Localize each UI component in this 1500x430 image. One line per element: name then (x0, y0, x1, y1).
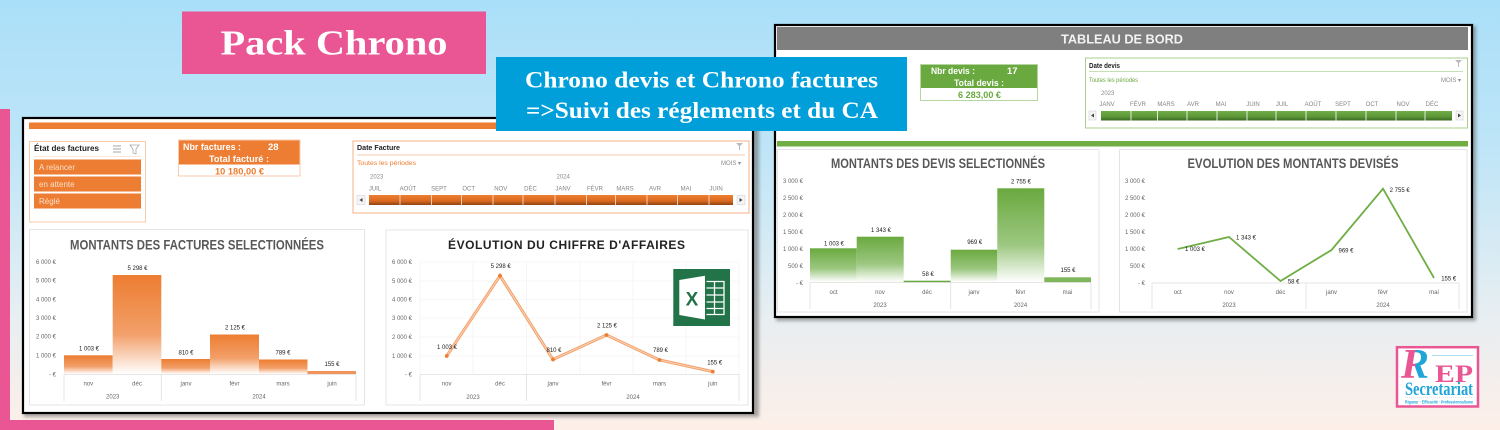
slicer: date facture: 2024 (556, 174, 571, 180)
chart: montants des devis: déc (922, 290, 932, 296)
chart: montants des devis: 1 343 € (871, 228, 892, 234)
chart: montants des devis: 2024 (1014, 303, 1028, 309)
chart: montants des devis: 2023 (873, 303, 887, 309)
slicer: date devis: JUIL (1276, 102, 1289, 108)
chart: evolution des montants devises: 3 000 € (1125, 179, 1146, 185)
KPI: devis: 6 283,00 € (958, 90, 1002, 101)
chart: montants des devis: févr (1015, 290, 1026, 296)
chart: montants des devis: mai (1063, 290, 1072, 296)
slicer: date facture: JUIN (709, 186, 723, 192)
chart: montants des devis: 500 € (788, 264, 804, 270)
chart: evolution du chiffre d'affaires: déc (495, 382, 505, 388)
chart: montants des devis: 2 755 € (1011, 180, 1032, 186)
slicer: date devis: OCT (1366, 102, 1379, 108)
chart: evolution du chiffre d'affaires: 5 000 € (392, 279, 413, 285)
slicer: date devis: MOIS ▾ (1441, 78, 1461, 84)
chart: evolution des montants devises: 1 500 € (1125, 230, 1146, 236)
chart: montants des factures: 810 € (178, 350, 194, 356)
title box: pack chrono (182, 12, 486, 74)
KPI: factures (178, 140, 300, 178)
chart: evolution du chiffre d'affaires: 6 000 € (392, 260, 413, 266)
chart: montants des factures: juin (326, 382, 337, 388)
chart: montants des factures: 789 € (275, 350, 291, 356)
chart: montants des devis: 58 € (922, 272, 934, 278)
chart: evolution des montants devises: 500 € (1130, 264, 1146, 270)
chart: evolution des montants devises: 1 003 € (1185, 247, 1206, 253)
chart: evolution des montants devises: 1 000 € (1125, 247, 1146, 253)
chart: montants des factures: 155 € (324, 362, 340, 368)
KPI: devis (920, 64, 1038, 101)
header bar: tableau de bord: TABLEAU DE BORD (1061, 32, 1183, 46)
chart: evolution du chiffre d'affaires: févr (601, 382, 612, 388)
chart: evolution des montants devises: nov (1224, 290, 1234, 296)
chart: montants des factures: 1 000 € (36, 353, 57, 359)
chart: montants des factures: déc (132, 382, 142, 388)
logo: rep secretariat: R (1400, 342, 1429, 388)
chart: montants des devis (778, 150, 1099, 312)
slicer: date devis: MAI (1216, 102, 1227, 108)
subtitle box: chrono devis et factures (496, 57, 907, 131)
chart: evolution du chiffre d'affaires: 810 € (546, 348, 562, 354)
slicer: date devis: DÉC (1426, 101, 1439, 108)
chart: montants des devis: janv (967, 290, 980, 296)
chart: montants des devis: 155 € (1060, 268, 1076, 274)
chart: evolution du chiffre d'affaires: juin (707, 382, 717, 388)
chart: montants des factures: nov (83, 382, 93, 388)
chart: montants des factures: 3 000 € (36, 316, 57, 322)
slicer: date facture: AVR (649, 186, 662, 192)
slicer: date facture: MOIS ▾ (721, 161, 741, 167)
slicer: date facture: Date Facture (357, 145, 400, 152)
chart: montants des factures (30, 230, 364, 405)
chart: evolution des montants devises: 2 000 € (1125, 213, 1146, 219)
chart: montants des devis: oct (829, 290, 838, 296)
slicer: date facture: AOÛT (400, 186, 417, 192)
chart: evolution du chiffre d'affaires: mars (653, 382, 666, 388)
chart: evolution du chiffre d'affaires: 155 € (707, 360, 723, 366)
button: a relancer: A relancer (39, 163, 75, 172)
icon: excel (673, 269, 730, 326)
logo: rep secretariat: Rigueur · Efficacité · Professionnalisme (1405, 400, 1473, 404)
button: regle: Réglé (39, 197, 60, 206)
chart: montants des factures: mars (276, 382, 290, 388)
panel: factures dashboard (23, 118, 759, 417)
chart: montants des factures: févr (229, 382, 240, 388)
chart: evolution du chiffre d'affaires: 2 125 € (597, 324, 618, 330)
slicer: date facture: JANV (555, 186, 571, 192)
slicer: date devis (1086, 58, 1468, 128)
chart: evolution des montants devises: déc (1276, 290, 1285, 296)
KPI: devis: 17 (1007, 66, 1018, 77)
slicer: date devis: NOV (1396, 102, 1410, 108)
slicer: date facture: MARS (616, 186, 634, 192)
subtitle box: chrono devis et factures: Chrono devis et Chrono factures (525, 68, 878, 92)
KPI: devis: Nbr devis : (931, 66, 975, 77)
chart: evolution des montants devises: 2024 (1376, 303, 1390, 309)
slicer: date devis: Date devis (1089, 63, 1120, 70)
orange header bar (29, 122, 749, 129)
green divider bar (777, 141, 1468, 146)
chart: evolution des montants devises: - € (1138, 281, 1146, 287)
chart: montants des factures: janv (179, 382, 192, 388)
chart: montants des devis: nov (875, 290, 885, 296)
logo: rep secretariat: Secretariat (1405, 379, 1474, 400)
chart: evolution des montants devises: 969 € (1338, 248, 1354, 254)
logo: rep secretariat (1397, 342, 1478, 406)
slicer: date facture: NOV (494, 186, 507, 192)
header bar: tableau de bord (777, 27, 1468, 50)
chart: evolution des montants devises (1120, 150, 1467, 312)
chart: montants des factures: MONTANTS DES FACTURES SELECTIONNÉES (70, 236, 324, 252)
chart: montants des factures: 2 125 € (225, 326, 246, 332)
slicer: date devis: MARS (1157, 102, 1175, 108)
subtitle box: chrono devis et factures: =>Suivi des réglements et du CA (526, 98, 878, 123)
button: en attente: en attente (39, 180, 75, 189)
KPI: factures: Total facturé : (209, 154, 269, 165)
chart: evolution des montants devises: oct (1174, 290, 1182, 296)
chart: evolution du chiffre d'affaires: 2023 (466, 395, 480, 401)
chart: evolution des montants devises: 58 € (1288, 280, 1300, 286)
icon: excel: X (686, 290, 699, 310)
slicer: date devis: FÉVR (1130, 101, 1147, 108)
pink corner band (0, 109, 554, 430)
KPI: factures: Nbr factures : (183, 142, 241, 153)
slicer: date facture: OCT (462, 186, 475, 192)
chart: evolution du chiffre d'affaires: 1 003 € (437, 345, 458, 351)
chart: montants des devis: 2 500 € (783, 196, 804, 202)
slicer: date facture: FÉVR (587, 186, 604, 192)
chart: evolution du chiffre d'affaires: ÉVOLUTION DU CHIFFRE D'AFFAIRES (448, 237, 685, 252)
chart: evolution du chiffre d'affaires: 3 000 € (392, 316, 413, 322)
chart: montants des devis: 1 003 € (824, 242, 845, 248)
chart: montants des devis: 969 € (967, 240, 983, 246)
chart: evolution du chiffre d'affaires: 4 000 € (392, 298, 413, 304)
chart: evolution des montants devises: 2023 (1222, 303, 1236, 309)
chart: montants des devis: MONTANTS DES DEVIS SELECTIONNÉS (831, 156, 1045, 171)
slicer: date devis: Toutes les périodes (1089, 77, 1139, 84)
chart: evolution du chiffre d'affaires: janv (546, 382, 559, 388)
title box: pack chrono: Pack Chrono (220, 24, 448, 62)
slicer: date facture (353, 141, 749, 213)
chart: montants des factures: 2023 (106, 394, 120, 400)
chart: evolution du chiffre d'affaires: nov (442, 382, 452, 388)
chart: evolution des montants devises: 2 500 € (1125, 196, 1146, 202)
slicer: date devis: JUIN (1246, 102, 1260, 108)
slicer: date facture: SEPT (431, 186, 447, 192)
slicer: date devis: AOÛT (1305, 101, 1322, 108)
chart: evolution des montants devises: 155 € (1441, 276, 1457, 282)
chart: montants des factures: 5 000 € (36, 279, 57, 285)
chart: montants des devis: 3 000 € (783, 179, 804, 185)
chart: montants des devis: 1 000 € (783, 247, 804, 253)
chart: evolution des montants devises: 1 343 € (1236, 236, 1257, 242)
chart: montants des factures: 1 003 € (79, 346, 100, 352)
chart: montants des devis: 1 500 € (783, 230, 804, 236)
chart: montants des devis: 2 000 € (783, 213, 804, 219)
chart: evolution des montants devises: 2 755 € (1390, 188, 1410, 194)
slicer: etat des factures (30, 142, 146, 222)
slicer: date devis: SEPT (1335, 102, 1351, 108)
slicer: date devis: JANV (1099, 102, 1115, 108)
chart: montants des factures: - € (49, 372, 57, 378)
KPI: factures: 10 180,00 € (215, 166, 265, 178)
chart: evolution du chiffre d'affaires: - € (405, 372, 413, 378)
slicer: etat des factures: État des factures (34, 144, 100, 153)
panel: devis dashboard (775, 25, 1476, 321)
logo: rep secretariat: EP (1435, 361, 1473, 388)
chart: evolution des montants devises: févr (1378, 290, 1388, 296)
chart: evolution des montants devises: mai (1429, 290, 1439, 296)
chart: montants des factures: 4 000 € (36, 297, 57, 303)
chart: montants des factures: 2 000 € (36, 335, 57, 341)
KPI: devis: Total devis : (954, 78, 1004, 89)
chart: evolution du chiffre d'affaires: 2024 (626, 395, 640, 401)
chart: evolution du chiffre d'affaires (386, 230, 748, 405)
slicer: date facture: DÉC (524, 186, 537, 192)
slicer: date devis: AVR (1187, 102, 1200, 108)
chart: evolution du chiffre d'affaires: 5 298 € (491, 264, 511, 270)
KPI: factures: 28 (268, 142, 279, 153)
slicer: date devis: 2023 (1101, 91, 1115, 97)
chart: evolution des montants devises: EVOLUTION DES MONTANTS DEVISÉS (1188, 156, 1398, 171)
slicer: date facture: MAI (681, 186, 692, 192)
chart: montants des factures: 6 000 € (36, 260, 57, 266)
chart: evolution du chiffre d'affaires: 1 000 € (392, 354, 413, 360)
chart: evolution des montants devises: janv (1325, 290, 1337, 296)
chart: montants des devis: - € (796, 281, 804, 287)
chart: evolution du chiffre d'affaires: 2 000 € (392, 335, 413, 341)
chart: montants des factures: 2024 (252, 394, 266, 400)
chart: montants des factures: 5 298 € (127, 266, 148, 272)
slicer: date facture: Toutes les périodes (357, 160, 417, 167)
slicer: date facture: 2023 (370, 174, 384, 180)
chart: evolution du chiffre d'affaires: 789 € (653, 348, 669, 354)
slicer: date facture: JUIL (369, 186, 382, 192)
